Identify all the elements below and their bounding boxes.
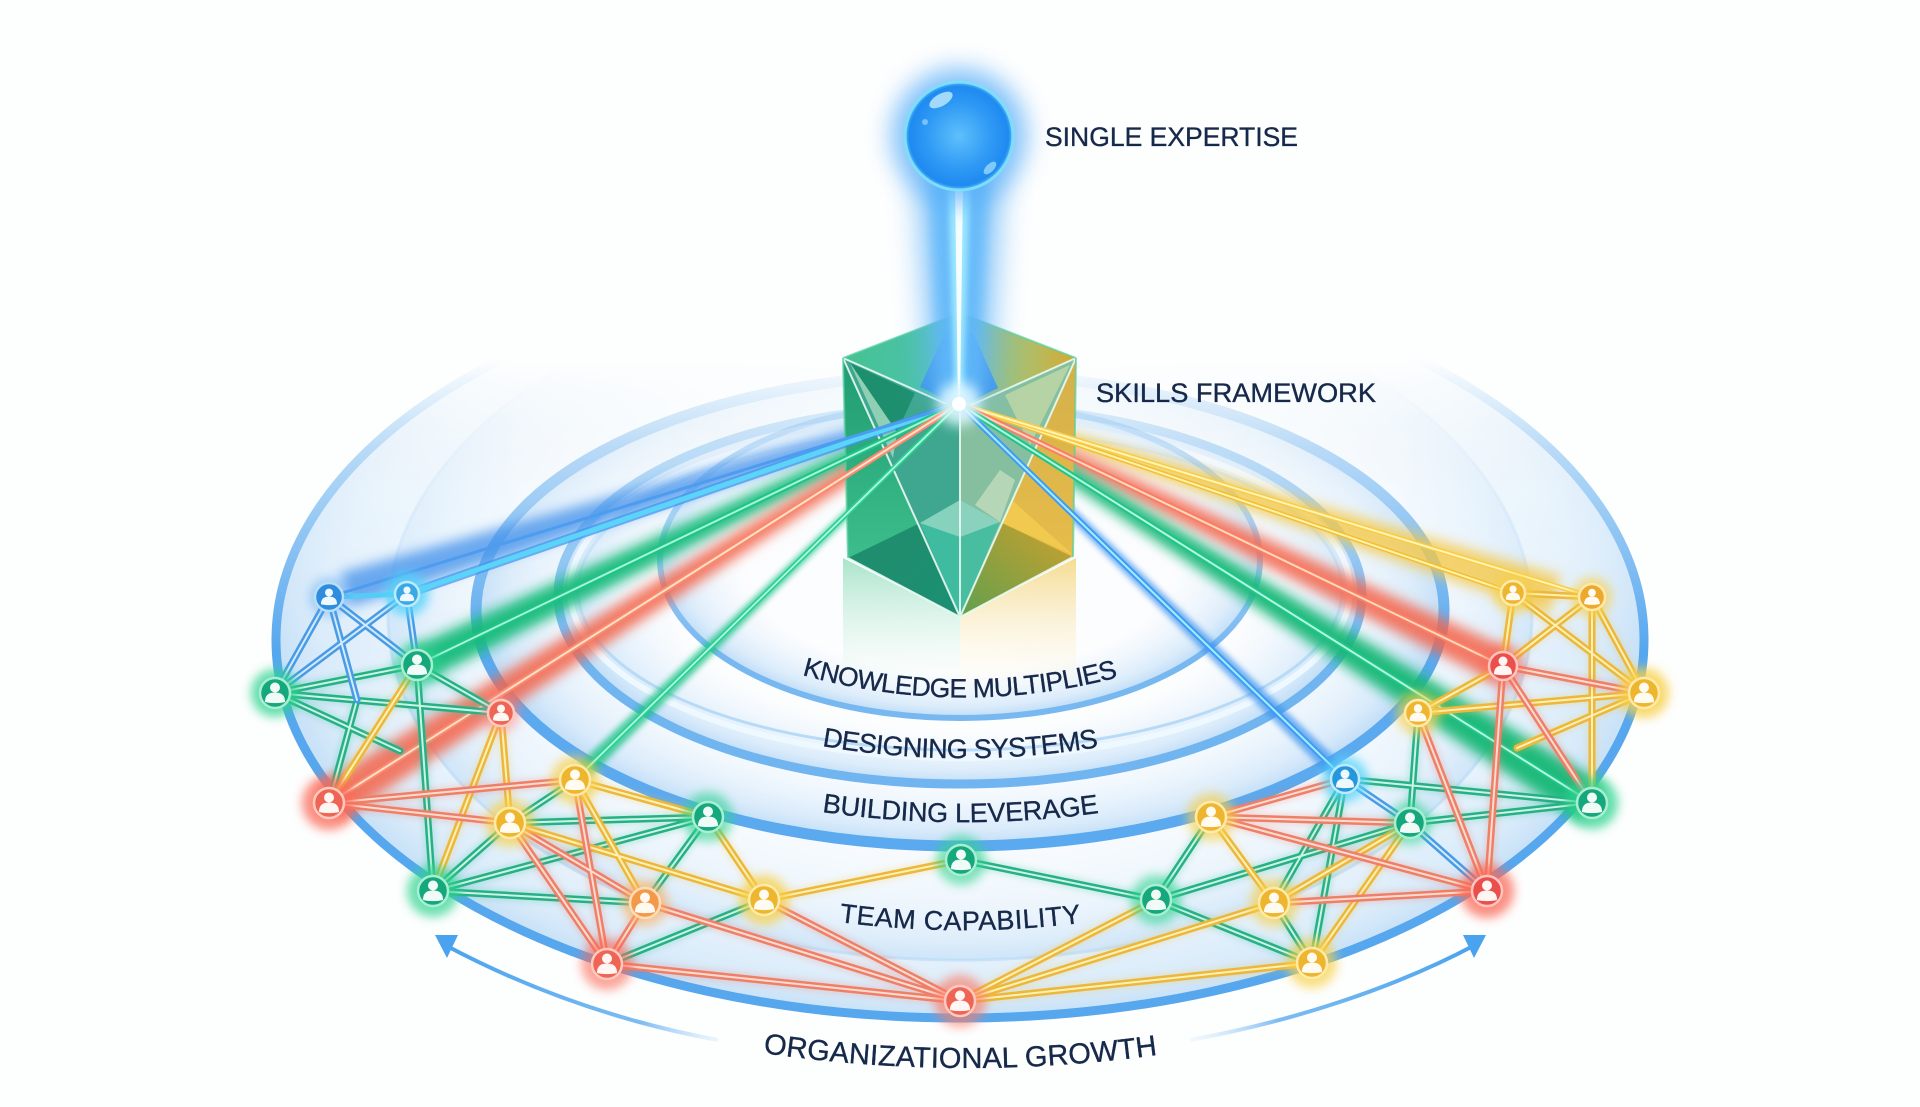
ray: yellow to top-right nodes	[959, 404, 1592, 597]
blue light column from sphere to prism	[915, 170, 1003, 405]
ray: green right	[959, 404, 1592, 803]
facet: pale upper right	[1005, 365, 1070, 445]
connection: cyan link between top-left nodes	[329, 594, 407, 597]
node: green	[1388, 801, 1432, 845]
cube: lower right gold facet	[960, 522, 1073, 617]
refracted rays leaving the prism	[329, 404, 1592, 803]
node: orange	[622, 880, 668, 926]
node: yellow	[739, 875, 789, 925]
infographic: knowledge multiplication from one expert to organization	[244, 52, 1676, 1068]
ray: blue to top-left nodes	[329, 404, 959, 597]
cube: top inner blue facet	[920, 333, 998, 407]
network nodes	[251, 572, 1669, 1027]
node: yellow	[551, 756, 599, 804]
label: organizational growth: ORGANIZATIONAL GROWTH	[765, 1034, 1156, 1068]
cube: top left face	[843, 313, 960, 410]
cube: top right face	[960, 313, 1076, 410]
prism light burst	[937, 382, 981, 426]
beam glow: blue right	[1027, 469, 1351, 785]
arrow: growth spreading right	[1190, 935, 1486, 1040]
ring: building leverage	[475, 373, 1445, 847]
node: blue	[309, 577, 349, 617]
node: red	[1481, 644, 1525, 688]
node: red	[1460, 864, 1514, 918]
node: red bottom centre	[934, 975, 986, 1027]
node: amber	[1572, 577, 1612, 617]
beam glow: red right	[1037, 437, 1511, 682]
beam glow: green right	[1036, 449, 1604, 822]
node: green	[1566, 777, 1618, 829]
ray: thin green to yellow node	[575, 404, 959, 780]
facet: pale upper left	[850, 363, 897, 458]
connections: red	[329, 666, 1644, 1001]
ray: red to node	[329, 404, 959, 803]
prism cube	[843, 313, 1076, 617]
node: yellow	[1396, 691, 1440, 735]
node: yellow	[1250, 879, 1298, 927]
cube: right face	[960, 358, 1076, 617]
node: red	[302, 776, 356, 830]
ring: designing systems	[557, 405, 1363, 785]
node: yellow	[1619, 668, 1669, 718]
prism kite left	[843, 358, 960, 617]
node: red	[581, 938, 633, 990]
facet: pale centre right	[975, 470, 1015, 522]
node: green	[251, 669, 299, 717]
facet: dark upper left	[850, 363, 915, 432]
beam glow: green thin left	[569, 470, 892, 786]
connections: blue	[275, 594, 1487, 891]
node: green centre	[936, 835, 986, 885]
node: red	[481, 693, 521, 733]
node: green	[1131, 875, 1181, 925]
ray: blue right	[959, 404, 1345, 779]
node: yellow	[1187, 793, 1235, 841]
beam glow: yellow right	[1038, 424, 1561, 614]
cube: left face	[843, 358, 960, 617]
facet: pale centre band	[920, 500, 1000, 537]
node: yellow	[1287, 938, 1337, 988]
connections: green	[275, 665, 1592, 964]
node: light blue	[385, 572, 429, 616]
prism reflection	[843, 558, 1076, 690]
label: skills framework: SKILLS FRAMEWORK	[1096, 378, 1376, 408]
facet: lower right teal	[960, 500, 1000, 617]
facet: lower left teal	[920, 500, 960, 617]
ring: organizational growth disc	[272, 370, 1648, 1022]
arrow: growth spreading left	[435, 935, 718, 1040]
cube: lower left dark facet	[848, 523, 960, 617]
cube edges	[843, 358, 1076, 617]
ray: green to node	[417, 404, 959, 665]
prism kite right	[960, 358, 1076, 617]
beam glows fanning out from prism	[318, 421, 1604, 822]
node: yellow	[1493, 573, 1533, 613]
concentric ripple rings	[272, 370, 1648, 1022]
network connections	[275, 593, 1644, 1001]
beam glow: green left	[409, 436, 883, 681]
node: green	[394, 642, 440, 688]
label: knowledge multiplies: KNOWLEDGE MULTIPLIES	[804, 658, 1116, 698]
node: blue	[1322, 756, 1368, 802]
ray: red right	[959, 404, 1503, 666]
label: single expertise: SINGLE EXPERTISE	[1045, 122, 1298, 152]
node: yellow	[486, 799, 534, 847]
label: designing systems: DESIGNING SYSTEMS	[824, 728, 1097, 759]
ring: knowledge multiplies	[660, 402, 1260, 718]
label: building leverage: BUILDING LEVERAGE	[824, 794, 1098, 822]
cube: upper gold glow facet	[1000, 500, 1073, 555]
connections: yellow	[329, 593, 1644, 1001]
beam glow: blue left	[340, 421, 882, 607]
glowing source sphere	[891, 68, 1027, 204]
node: green	[683, 792, 733, 842]
node: green	[407, 865, 459, 917]
beam glow: red left	[318, 448, 884, 820]
label: team capability: TEAM CAPABILITY	[841, 904, 1079, 930]
